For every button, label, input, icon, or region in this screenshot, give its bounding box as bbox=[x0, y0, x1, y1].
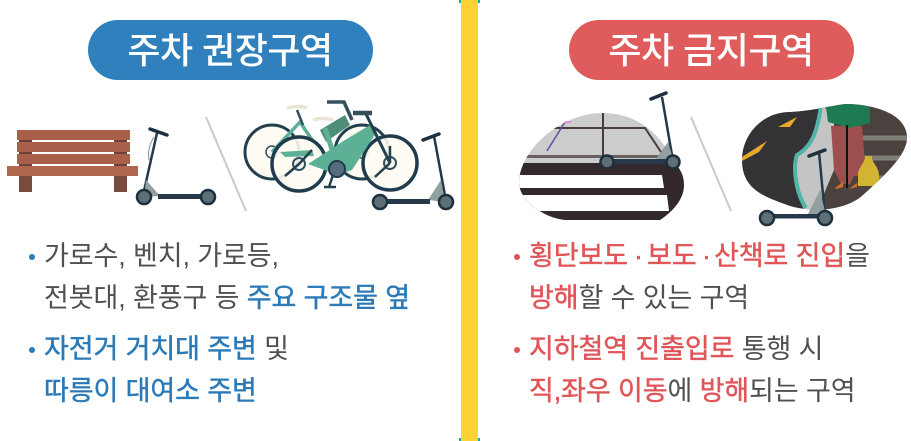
text block: prohibited list: 지하철역 진출입로 통행 시 bbox=[529, 334, 823, 364]
heading: no parking bbox=[569, 20, 854, 80]
text block: prohibited list: 보도 bbox=[647, 241, 696, 271]
text block: prohibited list: 을 bbox=[845, 241, 870, 271]
text block: prohibited list bbox=[514, 241, 870, 406]
icon: scooter by bench bbox=[137, 129, 215, 204]
text block: recommended list bbox=[29, 241, 410, 406]
text block: recommended list: 가로수, 벤치, 가로등, bbox=[44, 241, 279, 271]
divider: left panel slash bbox=[206, 117, 246, 211]
heading: recommended parking bbox=[88, 20, 373, 80]
icon: crosswalk blob with scooter bbox=[515, 93, 690, 225]
text block: prohibited list: 직,좌우 이동에 방해되는 구역 bbox=[529, 376, 856, 406]
icon: subway escalator blob with scooter bbox=[740, 100, 910, 225]
text block: recommended list: 전봇대, 환풍구 등 주요 구조물 옆 bbox=[44, 283, 410, 313]
heading: no parking: 주차 금지구역 bbox=[608, 30, 814, 71]
divider: right panel slash bbox=[691, 117, 731, 211]
text block: prohibited list: 산책로 진입 bbox=[714, 241, 845, 271]
center divider bar bbox=[459, 0, 480, 441]
text block: recommended list: 따릉이 대여소 주변 bbox=[44, 376, 257, 406]
heading: recommended parking: 주차 권장구역 bbox=[127, 30, 333, 71]
icon: scooter by bicycles bbox=[373, 134, 453, 209]
text block: prohibited list: · bbox=[702, 241, 711, 271]
icon: bicycles bbox=[245, 102, 417, 191]
text block: prohibited list: · bbox=[634, 241, 643, 271]
text block: prohibited list: 방해할 수 있는 구역 bbox=[529, 283, 749, 313]
text block: prohibited list: 횡단보도 bbox=[529, 241, 628, 271]
text block: recommended list: 자전거 거치대 주변 및 bbox=[44, 334, 289, 364]
icon: bench bbox=[7, 130, 138, 192]
